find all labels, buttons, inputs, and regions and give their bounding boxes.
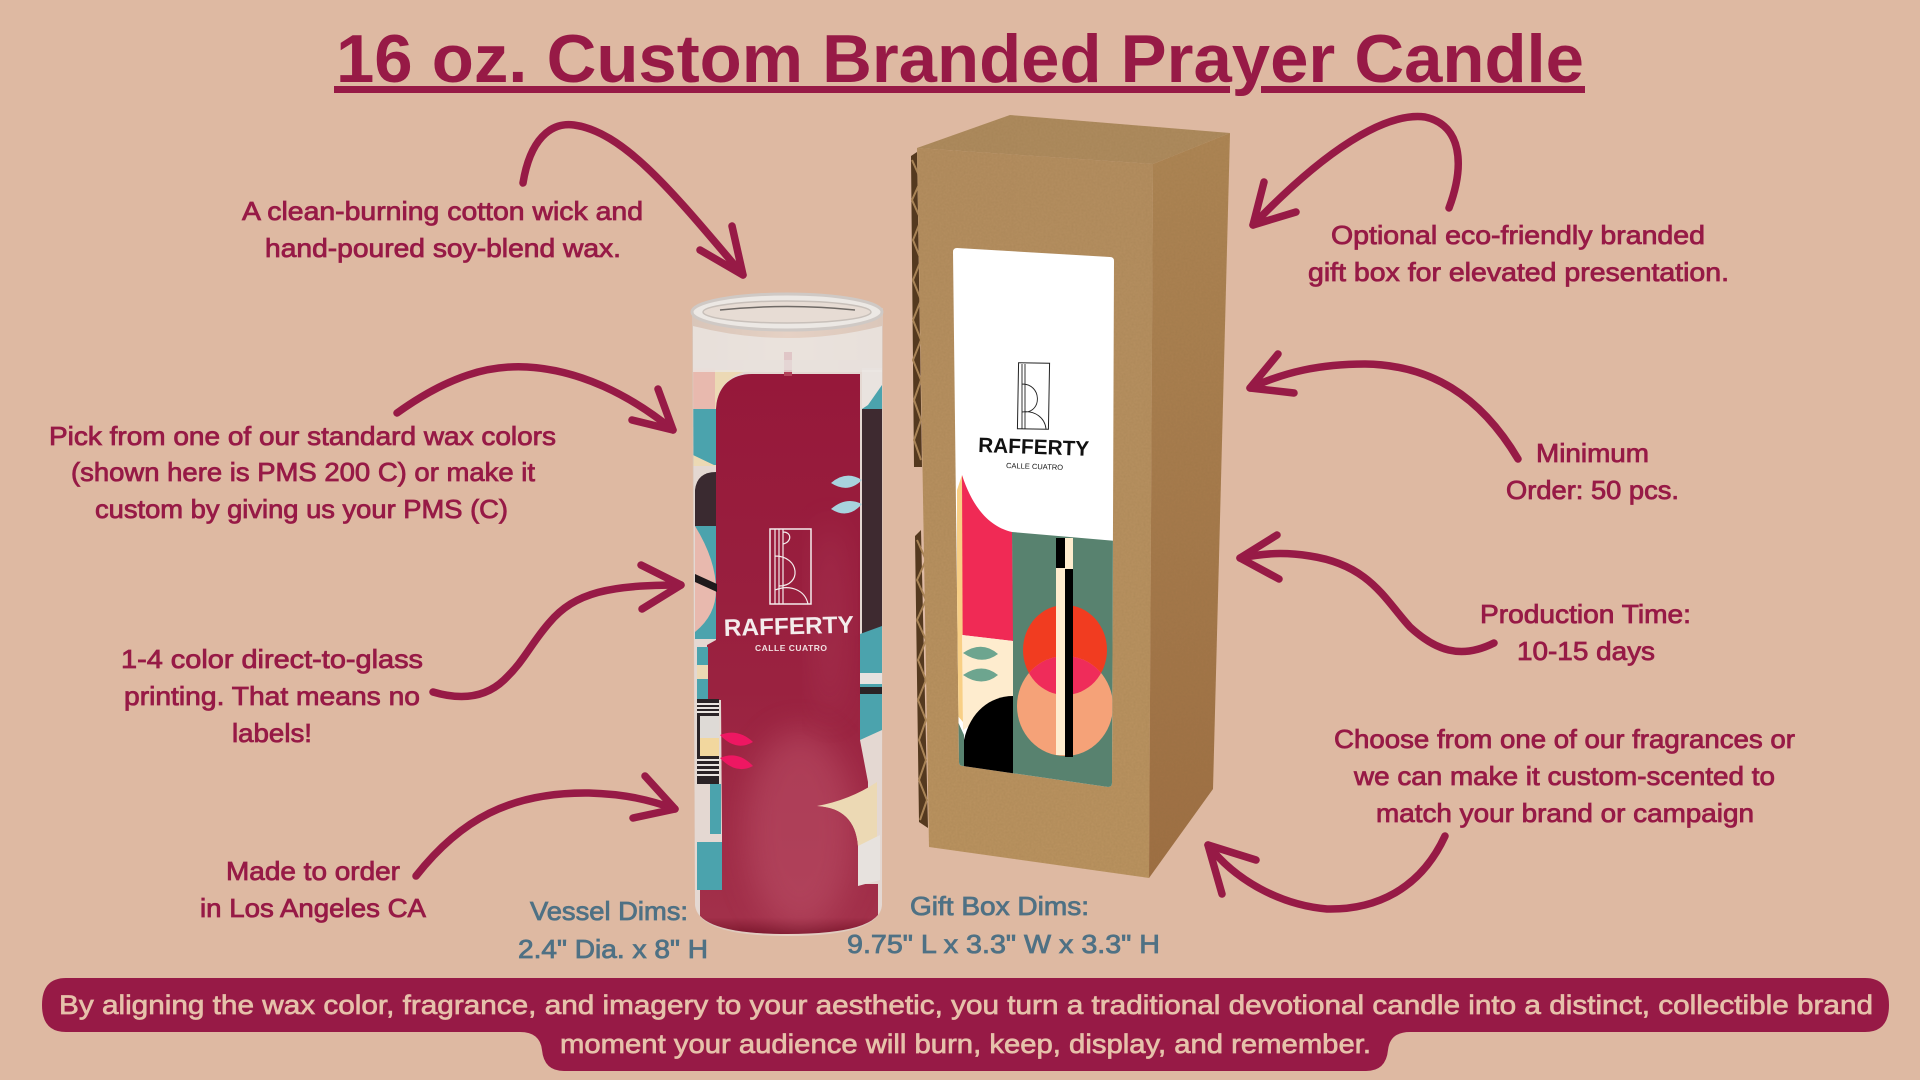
callout: direct-to-glass printing — [121, 644, 423, 748]
callout: made to order: in Los Angeles CA — [200, 893, 427, 923]
right label art — [817, 368, 882, 886]
callout: fragrances: match your brand or campaign — [1376, 798, 1754, 828]
arrow: wax colors to candle — [397, 367, 673, 430]
arrow: wick to candle top — [523, 125, 743, 275]
banner text: By aligning the wax color, fragrance, and imagery to your aesthetic, you turn a traditional devotional candle into a distinct, collectible brand — [59, 990, 1873, 1020]
box brand name: RAFFERTY — [978, 434, 1090, 461]
callout: wax colors: Pick from one of our standard wax colors — [49, 421, 556, 451]
label art: black arch — [964, 696, 1013, 775]
callout: fragrances: Choose from one of our fragrances or — [1334, 724, 1795, 754]
gift box dimensions: Gift Box Dims: — [910, 891, 1089, 921]
label art: yellow strip — [957, 475, 963, 722]
arrow: made to order to candle — [416, 776, 675, 876]
vessel dimensions — [518, 896, 708, 964]
box front face — [917, 148, 1153, 878]
callout: production time: Production Time: — [1480, 599, 1691, 629]
callout: minimum order — [1506, 438, 1679, 505]
box label — [950, 245, 1120, 790]
label art: leaves — [963, 647, 998, 682]
gift box dimensions — [847, 891, 1160, 959]
wax highlights — [742, 580, 856, 934]
box logo — [1017, 363, 1050, 429]
candle logo — [770, 529, 811, 604]
left label art — [693, 372, 743, 890]
arrow: gift box callout to box — [1253, 117, 1458, 225]
banner background — [42, 978, 1889, 1071]
wax body — [690, 374, 885, 940]
blue leaves — [831, 476, 862, 513]
bottom banner — [42, 978, 1889, 1071]
arrow: production time to box — [1240, 535, 1494, 652]
candle product image — [690, 294, 885, 940]
gift box product image — [905, 110, 1235, 885]
callout: made to order — [200, 856, 427, 923]
box corrugated edge — [911, 152, 928, 828]
gift box dimensions: 9.75" L x 3.3" W x 3.3" H — [847, 929, 1160, 959]
title: 16 oz. Custom Branded Prayer Candle — [336, 21, 1584, 97]
callout: minimum order: Minimum — [1536, 438, 1649, 468]
glass interior — [693, 372, 882, 940]
callout: minimum order: Order: 50 pcs. — [1506, 475, 1679, 505]
callout: gift box: gift box for elevated presentation. — [1308, 257, 1729, 287]
box right face — [1149, 133, 1230, 878]
pink leaves — [720, 733, 753, 769]
arrow: fragrances to box — [1208, 836, 1445, 909]
label art: pink panel — [962, 475, 1013, 641]
box brand name: CALLE CUATRO — [1006, 461, 1063, 472]
wick — [784, 352, 792, 376]
callout: wick and wax: hand-poured soy-blend wax. — [265, 233, 621, 263]
glass vessel — [692, 308, 883, 936]
box top flap — [917, 115, 1230, 164]
vessel dimensions: Vessel Dims: — [530, 896, 688, 926]
callout: fragrances — [1334, 724, 1795, 828]
callout: made to order: Made to order — [226, 856, 400, 886]
callout: direct-to-glass printing: 1-4 color direct-to-glass — [121, 644, 423, 674]
vessel dimensions: 2.4" Dia. x 8" H — [518, 934, 708, 964]
candle brand name: CALLE CUATRO — [755, 643, 827, 653]
callout: wax colors — [49, 421, 556, 524]
callout: production time: 10-15 days — [1517, 636, 1655, 666]
callout: direct-to-glass printing: printing. That means no — [124, 681, 420, 711]
label art: stripes — [1056, 538, 1065, 568]
banner text — [59, 990, 1873, 1059]
glass rim — [692, 294, 882, 372]
arrow: printing to candle — [433, 565, 681, 696]
arrow: minimum order to box — [1250, 354, 1518, 459]
label art: circles — [1017, 605, 1113, 756]
callout: gift box — [1308, 220, 1729, 287]
callout: wax colors: (shown here is PMS 200 C) or make it — [71, 457, 536, 487]
candle brand name: RAFFERTY — [723, 612, 854, 642]
callout: gift box: Optional eco-friendly branded — [1331, 220, 1705, 250]
callout: wick and wax: A clean-burning cotton wick and — [242, 196, 643, 226]
label art: green panel — [1012, 532, 1116, 790]
label art: cream panel — [962, 635, 1013, 730]
callout: production time — [1480, 599, 1691, 666]
callout: wick and wax — [242, 196, 643, 263]
banner text: moment your audience will burn, keep, display, and remember. — [560, 1029, 1371, 1059]
callout: fragrances: we can make it custom-scented to — [1353, 761, 1775, 791]
callout: direct-to-glass printing: labels! — [232, 718, 312, 748]
callout: wax colors: custom by giving us your PMS (C) — [95, 494, 508, 524]
